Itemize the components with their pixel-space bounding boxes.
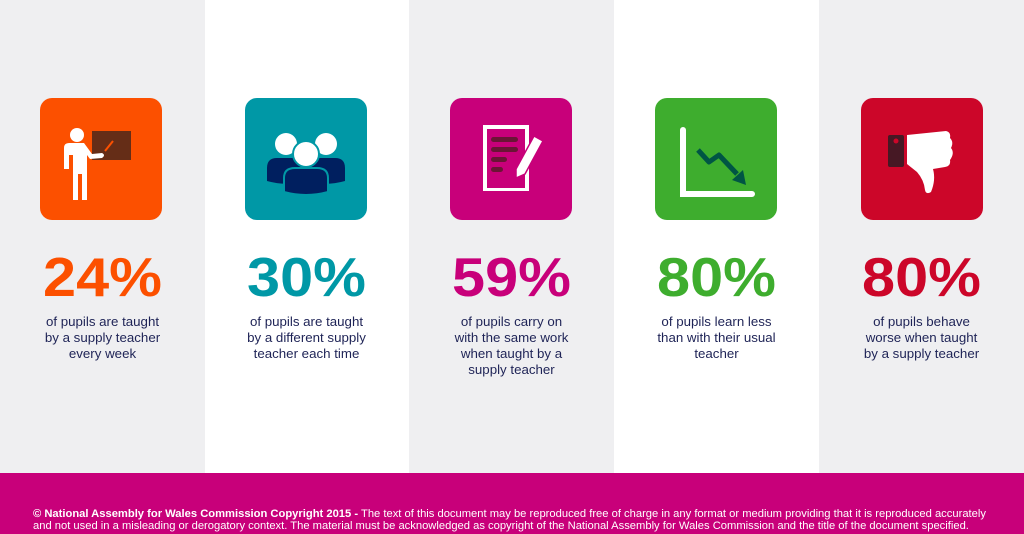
icon: group <box>245 98 367 220</box>
caption 2: by a different supply <box>247 330 366 345</box>
caption 4: than with their usual <box>657 330 776 345</box>
caption 1: of pupils are taught <box>46 314 159 329</box>
stat: 30%: 30% <box>247 246 366 308</box>
caption 3: when taught by a <box>461 346 562 361</box>
icon: declining chart <box>655 98 777 220</box>
caption 5: of pupils behave <box>873 314 970 329</box>
caption 4 <box>657 314 776 361</box>
caption 5 <box>864 314 979 361</box>
caption 5: worse when taught <box>866 330 977 345</box>
icon: document with pencil <box>450 98 572 220</box>
caption 1 <box>45 314 160 361</box>
caption 2 <box>247 314 366 361</box>
icon: thumbs down <box>861 98 983 220</box>
caption 5: by a supply teacher <box>864 346 979 361</box>
caption 2: teacher each time <box>254 346 359 361</box>
footer: copyright <box>0 473 1024 534</box>
caption 3 <box>454 314 568 377</box>
caption 4: teacher <box>694 346 739 361</box>
footer: copyright: © National Assembly for Wales Commission Copyright 2015 - The text of this document may be reproduced free of charge in any format or medium providing that it is reproduced accurately <box>33 508 986 520</box>
caption 2: of pupils are taught <box>250 314 363 329</box>
caption 3: of pupils carry on <box>461 314 562 329</box>
stat: 59%: 59% <box>452 246 571 308</box>
stat: 24%: 24% <box>43 246 162 308</box>
caption 1: by a supply teacher <box>45 330 160 345</box>
footer: copyright: and not used in a misleading or derogatory context. The material must be acknowledged as copyright of the National Assembly for Wales Commission and the title of the document specified. <box>33 520 969 532</box>
stat: 80% learn less: 80% <box>657 246 776 308</box>
icon: teacher <box>40 98 162 220</box>
stat: 80% behave worse: 80% <box>862 246 981 308</box>
caption 4: of pupils learn less <box>661 314 772 329</box>
caption 1: every week <box>69 346 136 361</box>
caption 3: with the same work <box>455 330 568 345</box>
caption 3: supply teacher <box>468 362 555 377</box>
